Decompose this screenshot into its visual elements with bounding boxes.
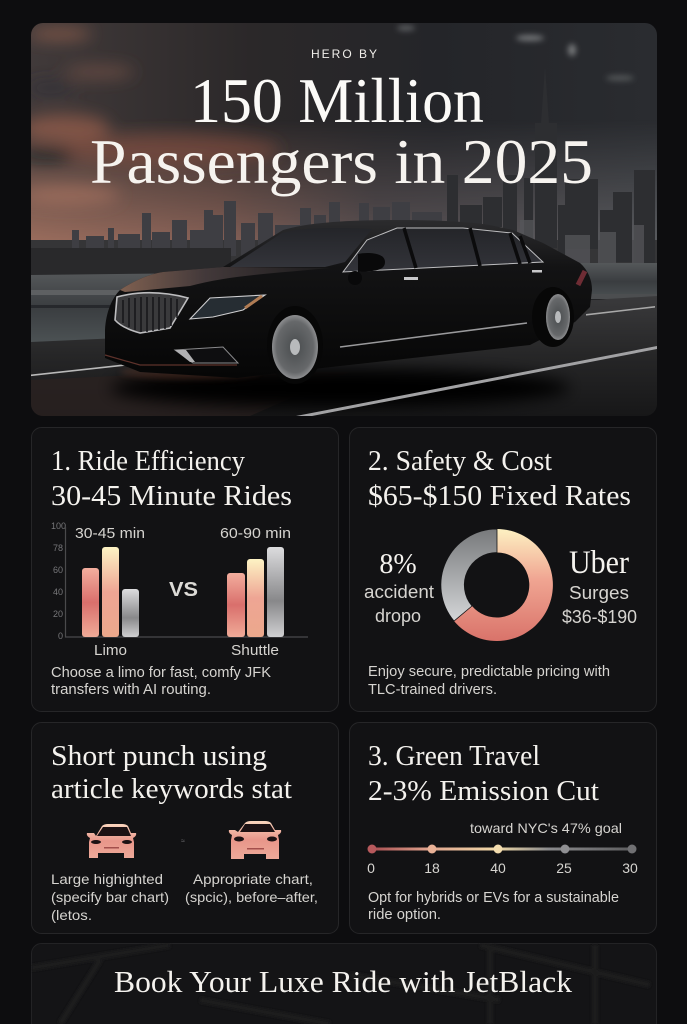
body text: green travel: ride option. — [368, 907, 441, 923]
faint map lines — [31, 945, 650, 1024]
heading: keywords stat: article keywords stat — [51, 774, 292, 805]
timeline chart: 40 — [490, 860, 506, 876]
caption: left: (specify bar chart) — [51, 889, 169, 905]
bar chart: limo vs shuttle: 30-45 min — [75, 525, 145, 542]
bar chart: limo vs shuttle: 60 — [53, 565, 63, 575]
goal note: toward NYC's 47% goal — [470, 820, 622, 836]
caption: right: (spcic), before–after, — [185, 889, 318, 905]
heading: keywords stat: Short punch using — [51, 741, 267, 772]
body text: ride efficiency: Choose a limo for fast, comfy JFK — [51, 665, 271, 681]
bar chart: limo vs shuttle: VS — [169, 579, 198, 601]
heading: ride efficiency: 1. Ride Efficiency — [51, 446, 245, 477]
panel: hero — [15, 23, 657, 416]
sky with sunset clouds — [31, 23, 657, 240]
eyebrow label: HERO BY — [311, 47, 377, 61]
body text: safety and cost: Enjoy secure, predictable pricing with — [368, 664, 610, 680]
donut chart — [441, 529, 553, 641]
panel: safety and cost — [350, 428, 656, 712]
timeline chart: 18 — [424, 860, 440, 876]
bar chart: limo vs shuttle: 78 — [53, 543, 63, 553]
bar chart: limo vs shuttle: 40 — [53, 587, 63, 597]
timeline chart: 25 — [556, 860, 572, 876]
hero title — [90, 66, 593, 197]
stat: uber surges: Uber — [569, 545, 629, 581]
body text: ride efficiency — [51, 665, 271, 698]
bar chart: limo vs shuttle: 100 — [51, 521, 66, 531]
heading: green travel: 2-3% Emission Cut — [368, 776, 599, 807]
separator mark: ≈ — [181, 838, 185, 845]
limousine — [105, 220, 592, 384]
heading: safety and cost: $65-$150 Fixed Rates — [368, 481, 631, 512]
caption: right: Appropriate chart, — [193, 871, 313, 887]
heading: safety and cost — [368, 446, 631, 512]
heading: ride efficiency: 30-45 Minute Rides — [51, 481, 292, 512]
body text: green travel: Opt for hybrids or EVs for a sustainable — [368, 890, 619, 906]
heading: green travel — [368, 741, 599, 807]
hero photo: limousine on highway with city skyline — [15, 23, 657, 416]
panel: keywords stat — [32, 722, 338, 934]
stat: accident drop: dropo — [375, 606, 421, 626]
bar chart: limo vs shuttle: 0 — [58, 631, 63, 641]
panel: call to action — [31, 944, 656, 1024]
stat: uber surges — [562, 545, 637, 627]
panel: green travel — [350, 722, 656, 934]
stat: accident drop: accident — [364, 582, 434, 602]
timeline chart: 0 — [367, 860, 375, 876]
caption: left — [51, 871, 169, 923]
stat: uber surges: Surges — [569, 583, 629, 603]
stat: uber surges: $36-$190 — [562, 607, 637, 627]
caption: left: Large highighted — [51, 871, 163, 887]
bar chart: limo vs shuttle: 60-90 min — [220, 525, 291, 542]
highway guard rail — [31, 263, 657, 343]
bar chart: limo vs shuttle: 20 — [53, 609, 63, 619]
heading: safety and cost: 2. Safety & Cost — [368, 446, 552, 477]
heading: keywords stat — [51, 741, 292, 805]
body text: safety and cost — [368, 664, 610, 698]
bar chart: limo vs shuttle — [51, 521, 308, 659]
hero title: Passengers in 2025 — [90, 127, 593, 197]
timeline chart: 30 — [622, 860, 638, 876]
body text: green travel — [368, 890, 619, 923]
icon: car right — [229, 821, 281, 859]
caption: right — [185, 871, 318, 905]
city skyline — [31, 154, 657, 275]
hero title: 150 Million — [190, 66, 484, 136]
caption: left: (letos. — [51, 907, 92, 923]
stat: accident drop — [364, 549, 434, 626]
body text: ride efficiency: transfers with AI routing. — [51, 682, 211, 698]
bar chart: limo vs shuttle: Shuttle — [231, 642, 279, 659]
stat: accident drop: 8% — [379, 549, 417, 580]
icon: car left — [87, 824, 136, 858]
heading: green travel: 3. Green Travel — [368, 741, 540, 772]
heading: ride efficiency — [51, 446, 292, 512]
call to action text: Book Your Luxe Ride with JetBlack — [114, 964, 572, 999]
bar chart: limo vs shuttle: Limo — [94, 642, 127, 659]
road — [31, 296, 657, 416]
panel: ride efficiency — [32, 428, 338, 712]
body text: safety and cost: TLC-trained drivers. — [368, 682, 497, 698]
timeline chart — [367, 844, 638, 876]
